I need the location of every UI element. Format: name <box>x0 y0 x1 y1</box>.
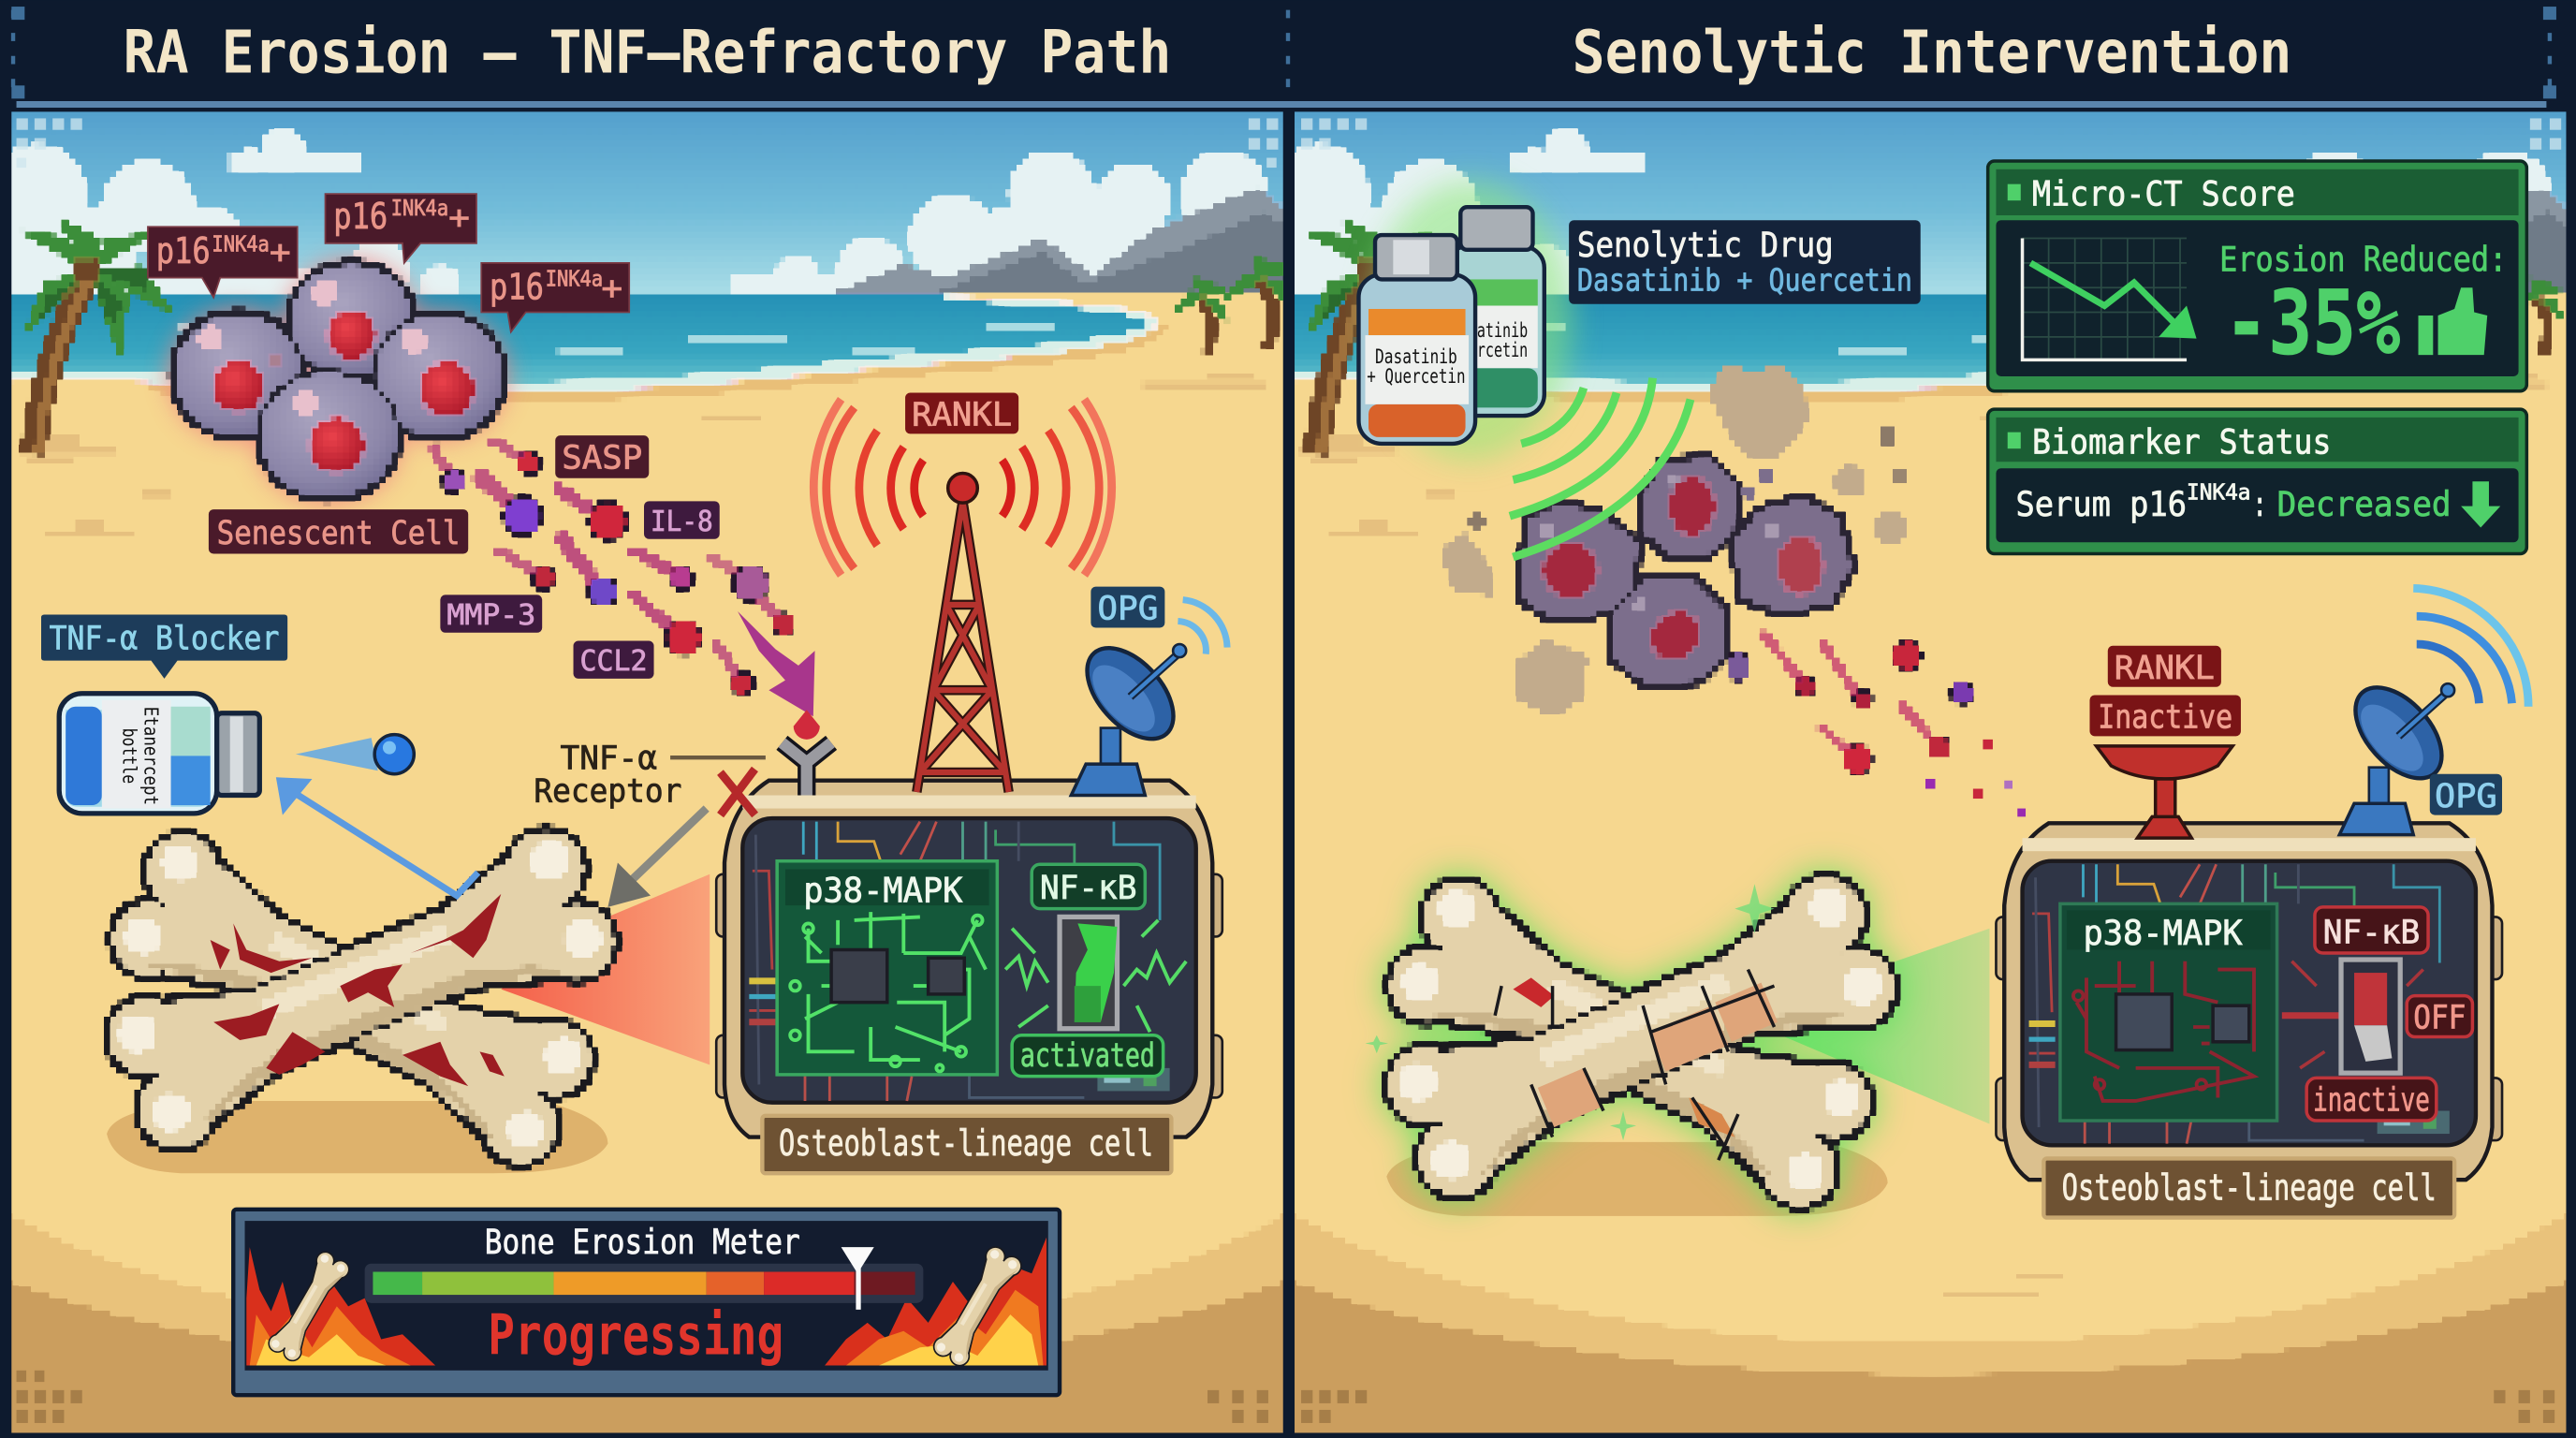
meter marker <box>842 1247 874 1310</box>
label: p16 left: + <box>270 233 291 271</box>
heading: micro-CT: Micro-CT Score <box>2032 173 2295 213</box>
label: OFF: OFF <box>2413 999 2466 1037</box>
panel: senolytic intervention <box>1109 98 2576 1438</box>
dying senescent cells <box>1519 457 1853 687</box>
header bar strip <box>11 7 2556 108</box>
text: serum p16 decreased: INK4a <box>2187 481 2250 506</box>
label: inactive <box>2306 1078 2437 1121</box>
chart: micro-CT trend <box>2023 239 2197 360</box>
icon: repaired bones <box>1365 859 1912 1225</box>
label: IL-8: IL-8 <box>651 506 713 538</box>
icon: red x blocked <box>723 772 753 812</box>
stat: erosion reduced <box>2219 240 2507 374</box>
panel: micro-CT score <box>1988 161 2526 391</box>
title: left: RA Erosion – TNF–Refractory Path <box>124 17 1171 86</box>
label: p16 right: INK4a <box>546 267 603 291</box>
label: NF-kB active: NF-κB <box>1040 869 1137 907</box>
label: inactive: inactive <box>2313 1081 2430 1120</box>
label: activated: activated <box>1020 1036 1155 1075</box>
green beam bone to cell <box>1781 929 1989 1124</box>
icon: drug vials <box>1358 181 1573 460</box>
label: TNF-alpha receptor <box>534 739 766 811</box>
label: TNF-alpha blocker: TNF-α Blocker <box>50 619 279 657</box>
text: serum p16 decreased: Serum p16 <box>2016 484 2187 524</box>
icon: RANKL signal waves <box>813 400 1112 575</box>
icon: flames <box>246 1238 1046 1366</box>
icon: OPG dish left <box>1071 632 1190 796</box>
icon: etanercept bottle <box>59 694 259 814</box>
label: RANKL: RANKL <box>912 396 1012 434</box>
icon: thumbs up <box>2419 287 2487 355</box>
heading: biomarker: Biomarker Status <box>2032 421 2331 462</box>
label: CCL2: CCL2 <box>580 645 648 678</box>
icon: OPG waves right <box>2413 588 2528 707</box>
label: p16 top: + <box>448 198 470 237</box>
label: senolytic drug: Dasatinib + Quercetin <box>1577 262 1912 299</box>
label: MMP-3: MMP-3 <box>446 599 535 632</box>
icon: small bones on fire <box>265 1242 1026 1371</box>
icon: palm trees right <box>1303 220 2566 453</box>
senescent cell cluster <box>168 258 509 505</box>
board: p38-MAPK inactive <box>2060 903 2277 1121</box>
corner pixels <box>17 118 1278 1423</box>
label: OPG left: OPG <box>1097 590 1158 628</box>
icon: palm trees left <box>20 220 1295 453</box>
label: TNF-alpha receptor: TNF-α <box>560 739 657 777</box>
front vial: + Quercetin <box>1367 364 1466 388</box>
back vial: rcetin <box>1477 338 1528 361</box>
sparkles <box>1365 884 1775 1140</box>
label: senolytic drug: Senolytic Drug <box>1577 225 1834 265</box>
meter title: Bone Erosion Meter <box>485 1222 800 1262</box>
stat: erosion reduced: Erosion Reduced: <box>2219 240 2507 280</box>
label: p16 right: p16 <box>490 266 544 308</box>
icon: RANKL tower <box>916 474 1009 792</box>
label: osteoblast-lineage cell right <box>2043 1158 2454 1218</box>
label: SASP: SASP <box>562 438 642 477</box>
label: osteoblast-lineage cell left <box>762 1116 1171 1173</box>
SASP particles <box>433 440 794 694</box>
red beam bone to cell <box>501 874 710 1064</box>
back vial <box>1445 207 1544 416</box>
label: osteoblast-lineage cell right: Osteoblast-lineage cell <box>2062 1167 2437 1209</box>
front vial <box>1358 235 1475 444</box>
icon: etanercept bottle: Etanercept <box>139 707 162 805</box>
stat: erosion reduced: -35% <box>2224 271 2400 374</box>
board: p38-MAPK active <box>777 861 997 1075</box>
bone shadow right <box>1386 1142 1888 1216</box>
label: TNF-alpha blocker <box>41 614 287 679</box>
panel: biomarker status <box>1988 409 2526 554</box>
label: TNF-alpha receptor: Receptor <box>534 772 681 811</box>
beach background left <box>11 111 1283 1432</box>
label: senolytic drug <box>1569 220 1921 304</box>
corner pixels right <box>1301 118 2561 1423</box>
icon: inactive RANKL antenna <box>2097 746 2232 838</box>
label: p16 top: p16 <box>333 196 388 238</box>
label: p16 right: + <box>601 269 622 307</box>
arrow: SASP to receptor <box>738 611 815 716</box>
label: OPG right: OPG <box>2435 777 2497 815</box>
beach background right <box>1109 98 2576 1438</box>
bone shadow <box>107 1101 607 1173</box>
arrow: blue feedback <box>276 777 478 896</box>
front vial: Dasatinib <box>1375 345 1457 368</box>
panel: bone erosion meter <box>233 1210 1060 1395</box>
blocker projectile <box>296 735 414 774</box>
text: serum p16 decreased <box>2016 481 2452 524</box>
meter bar <box>365 1264 923 1303</box>
label: p16 right <box>481 263 629 332</box>
board: p38-MAPK inactive: p38-MAPK <box>2083 913 2243 953</box>
icon: NF-kB switch on <box>1060 917 1117 1029</box>
icon: cell frame right <box>1996 823 2502 1180</box>
residual particles <box>1728 635 2026 816</box>
status: progressing: Progressing <box>488 1303 783 1368</box>
back vial: atinib <box>1477 318 1528 342</box>
label: inactive tower: Inactive <box>2098 698 2232 737</box>
label: p16 top <box>326 194 476 263</box>
label: p16 top: INK4a <box>391 197 448 221</box>
label: p16 left <box>148 227 298 298</box>
label: osteoblast-lineage cell left: Osteoblast-lineage cell <box>779 1123 1153 1165</box>
icon: NF-kB switch off <box>2282 960 2423 1073</box>
label: p16 left: p16 <box>156 230 211 272</box>
text: serum p16 decreased: Decreased <box>2277 484 2452 524</box>
icon: OPG waves left <box>1178 600 1227 654</box>
arrow: grey receptor to bone <box>607 809 707 907</box>
text: serum p16 decreased: : <box>2252 484 2267 524</box>
icon: etanercept bottle: bottle <box>119 728 141 784</box>
activity waves <box>1005 920 1186 1032</box>
cell debris <box>1441 365 1906 716</box>
label: senescent cell: Senescent Cell <box>217 514 460 552</box>
title: right: Senolytic Intervention <box>1573 17 2291 86</box>
icon: eroded crossed bones <box>90 813 633 1181</box>
label: NF-kB inactive: NF-κB <box>2323 913 2420 951</box>
icon: OPG dish right <box>2339 671 2458 835</box>
icon: cell frame left <box>716 781 1222 1137</box>
icon: TNF receptor <box>782 710 831 796</box>
senolytic waves <box>1510 378 1690 557</box>
label: RANKL right: RANKL <box>2115 649 2215 687</box>
board: p38-MAPK active: p38-MAPK <box>803 871 963 911</box>
panel: RA erosion TNF-refractory path <box>11 111 1283 1432</box>
label: p16 left: INK4a <box>212 233 270 257</box>
icon: down arrow <box>2461 481 2500 527</box>
